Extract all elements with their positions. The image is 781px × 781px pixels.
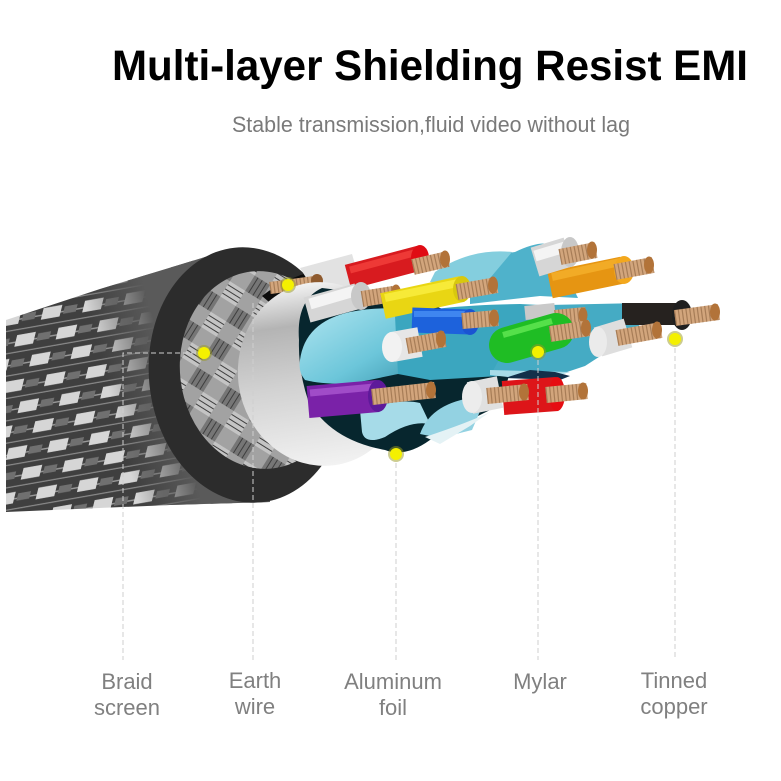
label: earth wire: wire: [234, 694, 275, 719]
label: earth wire: Earth: [229, 668, 281, 693]
leader lines: [123, 303, 675, 660]
wire: grey behind green: [525, 308, 588, 322]
black outer ring: [136, 237, 360, 513]
marker: braid screen: [196, 345, 212, 361]
wire: red lower: [503, 377, 588, 411]
wire: grey lower: [462, 381, 529, 413]
wire: grey right: [589, 322, 662, 357]
wire: grey middle: [382, 330, 446, 362]
label: braid screen: screen: [94, 695, 160, 720]
marker: earth wire: [280, 277, 296, 293]
wire: grey at top right: [535, 237, 597, 267]
label: tinned copper: [640, 668, 708, 719]
label: aluminum foil: Aluminum: [344, 669, 442, 694]
wire: purple: [308, 380, 436, 412]
wire: green: [503, 320, 591, 345]
wire: red: [348, 245, 450, 277]
earth wire recess and copper: [262, 254, 360, 320]
wire: yellow: [383, 276, 498, 306]
wire: black: [622, 300, 720, 330]
blue mylar foil ribbons: [300, 244, 655, 444]
label: braid screen: [94, 669, 160, 720]
label: aluminum foil: [344, 669, 442, 720]
title: Multi-layer Shielding Resist EMI: [112, 43, 748, 90]
wire: blue: [412, 309, 499, 335]
braided cable sheath: [6, 254, 270, 512]
wire: grey at top left: [307, 282, 401, 310]
label: braid screen: Braid: [101, 669, 153, 694]
braid screen weave: [170, 263, 354, 477]
subtitle: Stable transmission,fluid video without lag: [232, 112, 630, 137]
label: earth wire: [229, 668, 281, 719]
marker: tinned copper: [667, 331, 683, 347]
cable opening: [299, 288, 520, 452]
marker: mylar: [530, 344, 546, 360]
label: mylar: Mylar: [513, 669, 567, 694]
label: tinned copper: Tinned: [641, 668, 707, 693]
marker: aluminum foil: [388, 446, 404, 462]
aluminum foil tube: [226, 271, 418, 477]
label: tinned copper: copper: [640, 694, 708, 719]
wire: orange: [550, 256, 654, 285]
label: aluminum foil: foil: [379, 695, 407, 720]
